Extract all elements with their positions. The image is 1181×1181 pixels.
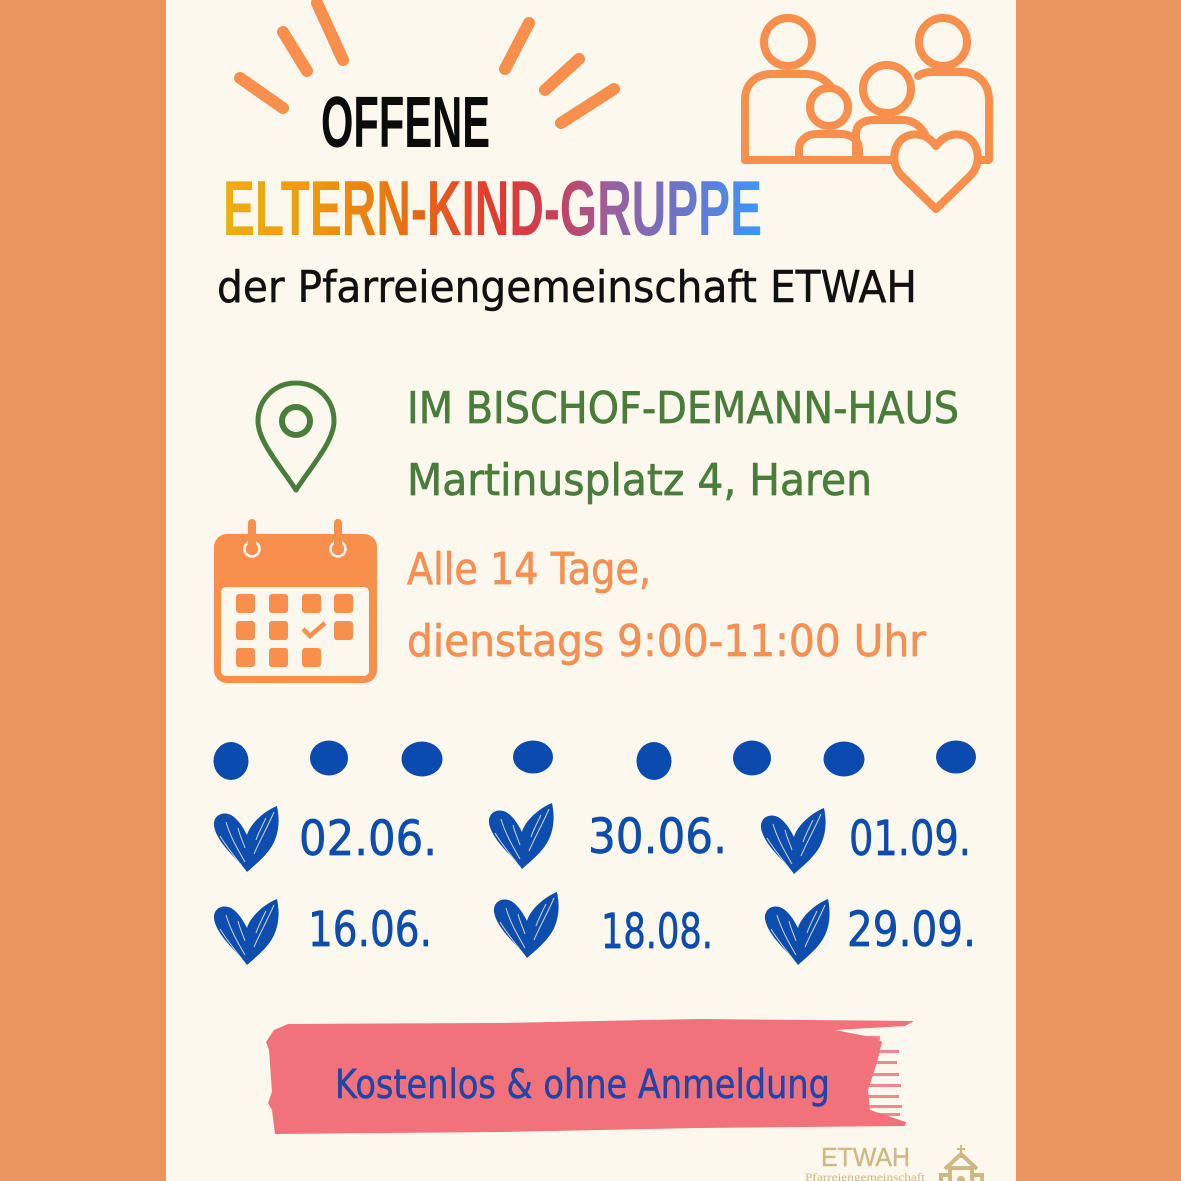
icon: heart 01.09. bbox=[761, 808, 826, 874]
title: OFFENE: OFFENE bbox=[321, 83, 490, 163]
row of blue dots bbox=[214, 740, 976, 780]
pink brush stroke banner bbox=[266, 1019, 914, 1134]
icon: right sunburst rays bbox=[505, 23, 614, 123]
icon: heart 30.06. bbox=[489, 803, 554, 869]
date 01.09.: 01.09. bbox=[849, 811, 971, 867]
location name: IM BISCHOF-DEMANN-HAUS bbox=[407, 383, 959, 434]
icon: heart 02.06. bbox=[214, 806, 279, 872]
subtitle: der Pfarreiengemeinschaft ETWAH bbox=[217, 262, 917, 313]
title: ELTERN-KIND-GRUPPE: ELTERN-KIND-GRUPPE bbox=[223, 164, 762, 252]
icon: heart 18.08. bbox=[494, 892, 559, 958]
schedule line 1: Alle 14 Tage, bbox=[407, 544, 651, 595]
icon: church logo bbox=[941, 1145, 982, 1181]
date 30.06.: 30.06. bbox=[588, 809, 727, 865]
date 29.09.: 29.09. bbox=[847, 902, 976, 958]
logo wordmark ETWAH: ETWAH bbox=[821, 1142, 910, 1172]
icon: left sunburst rays bbox=[240, 3, 343, 108]
date 02.06.: 02.06. bbox=[299, 811, 437, 867]
icon: heart 29.09. bbox=[765, 899, 830, 965]
icon: location pin bbox=[258, 383, 334, 490]
icon: family with heart bbox=[745, 18, 989, 209]
icon: calendar bbox=[214, 519, 377, 683]
date 18.08.: 18.08. bbox=[601, 904, 713, 960]
cream poster panel bbox=[166, 0, 1016, 1181]
location address: Martinusplatz 4, Haren bbox=[407, 455, 872, 506]
icon: heart 16.06. bbox=[214, 899, 279, 965]
schedule line 2: dienstags 9:00-11:00 Uhr bbox=[407, 616, 927, 667]
date 16.06.: 16.06. bbox=[308, 902, 432, 958]
banner text: Kostenlos & ohne Anmeldung bbox=[335, 1062, 830, 1108]
